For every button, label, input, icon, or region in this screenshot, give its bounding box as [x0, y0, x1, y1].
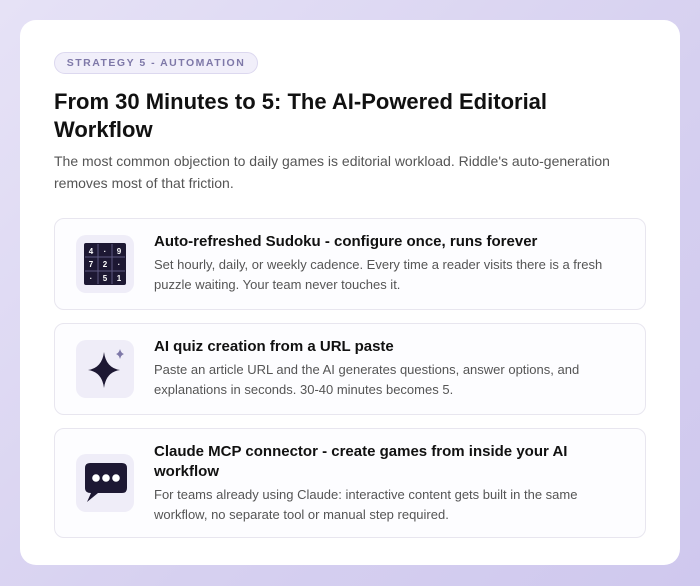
icon: sudoku grid: 2	[103, 260, 108, 269]
card text: Paste an article URL and the AI generates questions, answer options, and explanations in seconds. 30-40 minutes becomes 5.	[154, 362, 579, 397]
icon: sudoku grid	[76, 235, 134, 293]
title: From 30 Minutes to 5: The AI-Powered Editorial Workflow	[54, 89, 547, 142]
card: Claude MCP	[54, 428, 646, 538]
icon: sudoku grid: 7	[89, 260, 94, 269]
card text: Set hourly, daily, or weekly cadence. Every time a reader visits there is a fresh puzzle waiting. Your team never touches it.	[154, 257, 602, 292]
icon: sudoku grid: 9	[117, 247, 122, 256]
icon: sudoku grid: 4	[89, 247, 94, 256]
tag pill	[54, 52, 258, 74]
icon: sudoku grid: ·	[90, 274, 92, 283]
icon: sudoku grid: ·	[104, 247, 106, 256]
card title: Auto-refreshed Sudoku - configure once, runs forever	[154, 233, 537, 250]
icon: chat bubble	[76, 454, 134, 512]
icon: sparkle	[76, 340, 134, 398]
icon: sudoku grid: 1	[117, 274, 122, 283]
icon: sudoku grid: 5	[103, 274, 108, 283]
card text: For teams already using Claude: interactive content gets built in the same workflow, no separate tool or manual step required.	[154, 487, 577, 522]
card: AI quiz	[54, 323, 646, 415]
tag pill: STRATEGY 5 - AUTOMATION	[67, 57, 245, 69]
card title: AI quiz creation from a URL paste	[154, 338, 394, 355]
card: sudoku	[54, 218, 646, 310]
subtitle: The most common objection to daily games is editorial workload. Riddle's auto-generation removes most of that friction.	[54, 153, 610, 191]
card title: Claude MCP connector - create games from inside your AI workflow	[154, 443, 567, 480]
icon: sudoku grid: ·	[118, 260, 120, 269]
